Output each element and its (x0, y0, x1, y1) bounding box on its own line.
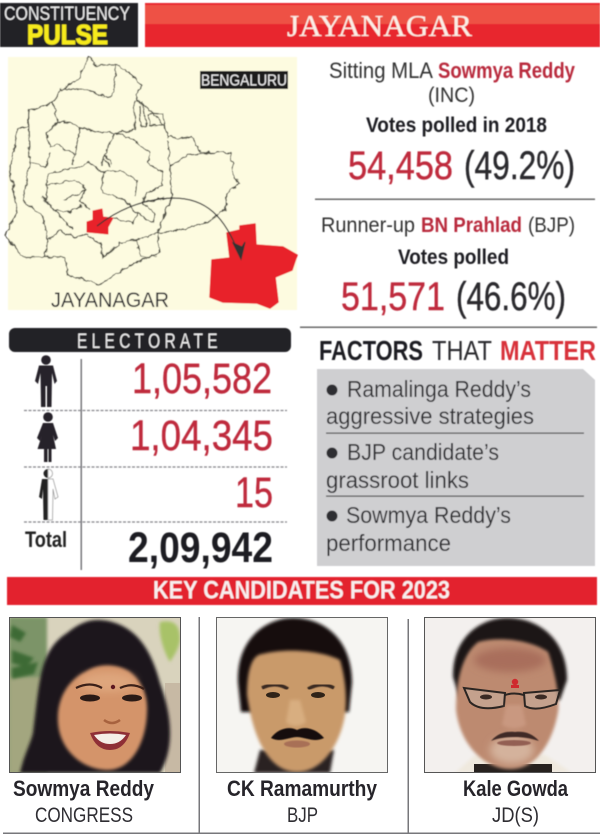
number: runner-up votes (341, 275, 566, 319)
map: enlarged Jayanagar (210, 224, 297, 308)
name: CK Ramamurthy: CK Ramamurthy (227, 776, 377, 801)
icon: woman (37, 412, 58, 462)
number: winner votes: 54,458 (348, 144, 453, 188)
heading: electorate (9, 328, 291, 353)
panel: factors that matter (317, 335, 596, 566)
text: runner-up (321, 213, 575, 237)
text: sitting MLA: Sowmya Reddy (438, 58, 575, 83)
background: factors box (317, 369, 595, 566)
heading: key candidates for 2023 (7, 576, 597, 605)
factor: Ramalinga Reddy: aggressive strategies (326, 403, 534, 429)
number: winner votes (348, 144, 575, 188)
text: sitting MLA (329, 58, 575, 83)
photo: Kale Gowda (424, 617, 596, 773)
heading: factors that matter (319, 335, 596, 366)
heading: key candidates for 2023: KEY CANDIDATES FOR 2023 (153, 576, 450, 604)
number: runner-up votes: 51,571 (341, 275, 445, 319)
heading: factors that matter: FACTORS (319, 335, 423, 366)
text: runner-up: (BJP) (528, 213, 575, 237)
text: sitting MLA: Sitting MLA (329, 58, 433, 83)
factor: BJP candidate: BJP candidate’s (347, 439, 499, 465)
title banner: Jayanagar (145, 3, 600, 47)
text: runner-up: Runner-up (321, 213, 415, 237)
badge: constituency pulse: CONSTITUENCY (4, 3, 130, 25)
label: total: Total (25, 527, 67, 552)
factor: Ramalinga Reddy: Ramalinga Reddy’s (347, 376, 531, 402)
label: Jayanagar: JAYANAGAR (51, 289, 169, 312)
heading: factors that matter: THAT (432, 335, 492, 366)
panel: candidate Sowmya Reddy (9, 617, 181, 827)
icon: man (35, 355, 57, 407)
text: votes polled: Votes polled (398, 245, 509, 269)
label: Bengaluru: BENGALURU (201, 72, 287, 90)
factor: BJP candidate: grassroot links (326, 467, 469, 493)
party: BJP: BJP (287, 803, 318, 827)
panel: candidate CK Ramamurthy (216, 617, 388, 827)
party: Congress: CONGRESS (35, 803, 133, 827)
factor: BJP candidate (326, 439, 499, 493)
badge: constituency pulse (0, 3, 138, 50)
number: male voters: 1,05,582 (132, 355, 272, 403)
text: runner-up: BN Prahlad (421, 213, 522, 237)
panel: 2018 winner (329, 58, 575, 188)
icon: third gender (39, 469, 58, 520)
photo: CK Ramamurthy (216, 617, 388, 773)
panel: electorate (9, 328, 291, 572)
text: party INC: (INC) (428, 84, 475, 107)
title banner: Jayanagar: JAYANAGAR (287, 8, 472, 43)
factor: Sowmya Reddy: performance (326, 530, 451, 556)
name: Kale Gowda: Kale Gowda (463, 776, 568, 801)
panel: runner-up (321, 213, 575, 319)
factor: Sowmya Reddy: Sowmya Reddy’s (346, 502, 511, 528)
map: Bengaluru wards outline (5, 57, 240, 285)
number: winner votes: (49.2%) (464, 144, 575, 188)
map: Jayanagar highlight (87, 209, 113, 234)
factor: Sowmya Reddy (326, 502, 511, 556)
number: runner-up votes: (46.6%) (456, 275, 566, 319)
number: third gender voters: 15 (235, 469, 273, 517)
photo: Sowmya Reddy (9, 617, 181, 773)
number: total voters: 2,09,942 (128, 524, 273, 572)
arrow: locator to enlarged area (97, 198, 245, 259)
heading: electorate: ELECTORATE (77, 328, 222, 353)
name: Sowmya Reddy: Sowmya Reddy (13, 776, 154, 801)
text: votes polled in 2018: Votes polled in 2018 (366, 113, 547, 137)
number: female voters: 1,04,345 (130, 412, 273, 460)
factor: Ramalinga Reddy (326, 376, 534, 429)
panel: constituency map (5, 57, 297, 312)
badge: constituency pulse: PULSE (27, 19, 108, 50)
party: JD(S): JD(S) (492, 803, 539, 827)
panel: candidate Kale Gowda (424, 617, 596, 827)
